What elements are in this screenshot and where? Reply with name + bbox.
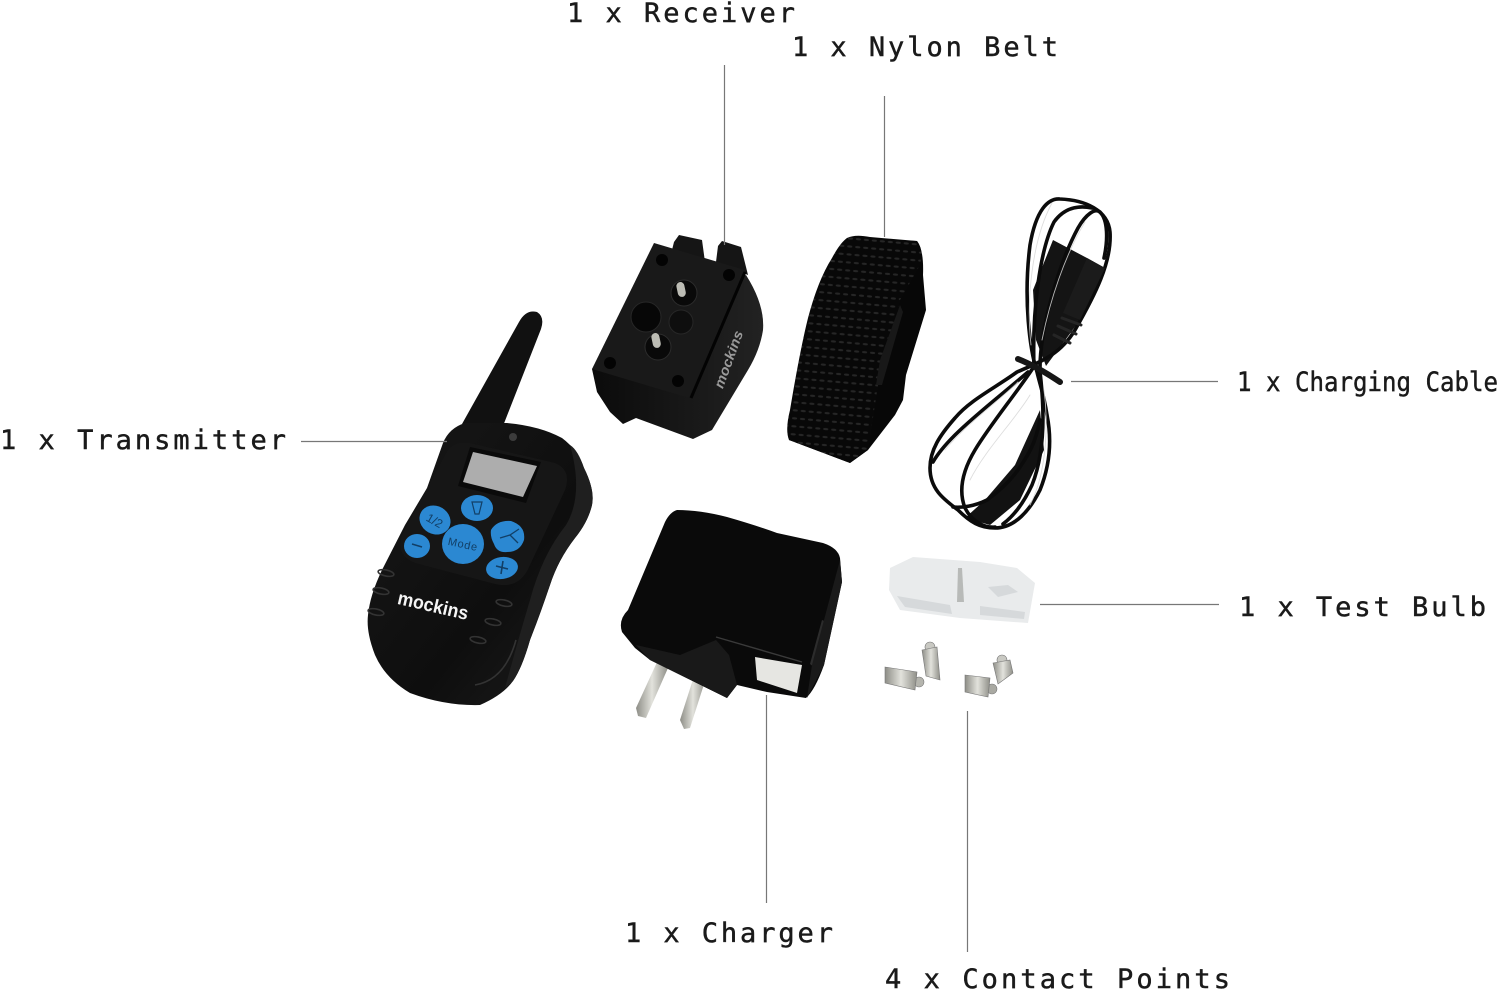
- button: mode: [442, 524, 484, 564]
- rating label: [755, 657, 802, 693]
- antenna: [462, 311, 542, 426]
- icon: receiver: [592, 235, 763, 439]
- label: transmitter: 1 x Transmitter: [0, 425, 286, 456]
- button: lamp: [461, 495, 493, 521]
- contact point 4: [965, 675, 997, 697]
- lower bundle backing: [965, 410, 1044, 525]
- button: mode: Mode: [447, 536, 479, 554]
- cable strands: [930, 199, 1110, 528]
- button: half: 1/2: [424, 511, 446, 531]
- label: test bulb: 1 x Test Bulb: [1239, 592, 1486, 623]
- contact face: [592, 243, 745, 398]
- brand logo: mockins: [395, 588, 470, 625]
- plug face edge: [716, 637, 802, 662]
- charger body: [621, 510, 842, 698]
- button: vibrate: [491, 521, 524, 552]
- icon: test bulb: [889, 557, 1035, 623]
- indicator light: [509, 433, 517, 441]
- belt silhouette and buckle: [789, 238, 926, 463]
- cable highlights: [945, 203, 1085, 505]
- edge shading: [505, 445, 593, 688]
- screen bezel: [458, 447, 541, 503]
- icon: contact points: [885, 642, 1013, 697]
- contact point 1: [922, 642, 940, 680]
- button: minus: [404, 534, 430, 558]
- prongs: [636, 660, 668, 718]
- slider bar: [876, 305, 903, 385]
- woven strap: [787, 236, 921, 463]
- button: plus: [485, 555, 519, 581]
- keypad panel: [400, 442, 567, 585]
- barrel connector: [1063, 258, 1105, 320]
- icon: charging cable: [930, 199, 1110, 528]
- connector backing: [1033, 240, 1105, 366]
- label: charger: 1 x Charger: [625, 918, 833, 949]
- bulb filament: [957, 568, 964, 602]
- button: half: [414, 500, 456, 540]
- screw holes: [604, 254, 735, 387]
- LCD screen: [463, 452, 537, 497]
- rear clips: [672, 235, 748, 275]
- sensor buttons: [631, 302, 661, 332]
- USB port side: [810, 620, 827, 668]
- icon: nylon belt: [787, 236, 926, 463]
- cable tie: [1018, 359, 1060, 382]
- grip ridges: [368, 568, 516, 685]
- label: nylon belt: 1 x Nylon Belt: [792, 32, 1058, 63]
- icon: charger: [621, 510, 842, 729]
- receiver housing: [592, 275, 763, 439]
- transmitter body: [368, 423, 593, 705]
- contact point 3: [993, 655, 1013, 684]
- contact posts: [645, 280, 697, 360]
- contact point 2: [885, 667, 924, 690]
- receiver logo: mockins: [711, 328, 746, 390]
- plug base: [636, 640, 737, 698]
- icon: transmitter: [368, 311, 593, 705]
